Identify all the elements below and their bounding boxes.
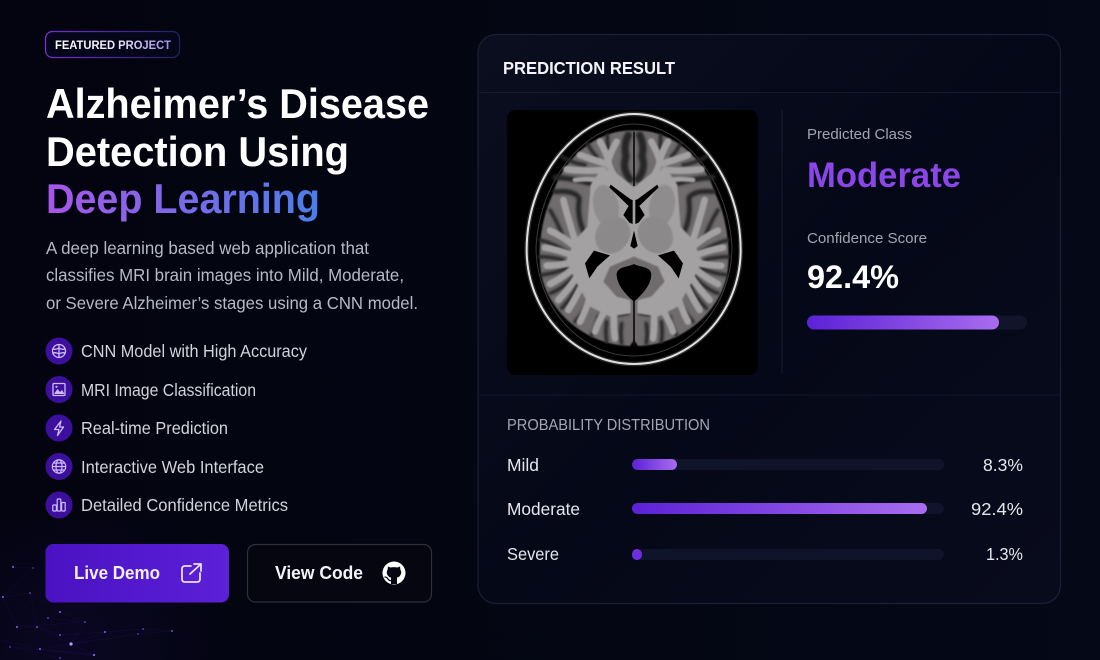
feature: CNN model: CNN Model with High Accuracy — [81, 341, 307, 361]
feature list — [46, 338, 307, 518]
icon: github — [382, 562, 406, 584]
ventricles and midline — [585, 185, 683, 302]
predicted class — [807, 126, 961, 195]
panel: prediction result — [478, 34, 1060, 604]
icon: external link — [182, 564, 201, 582]
MRI brain image — [507, 110, 758, 375]
description text: or Severe Alzheimer’s stages using a CNN model. — [46, 293, 418, 313]
button: live demo: Live Demo — [74, 563, 160, 583]
deep nuclei — [592, 185, 676, 254]
description text: A deep learning based web application that — [46, 238, 369, 258]
row: mild — [507, 455, 1023, 475]
panel heading: PREDICTION RESULT — [503, 58, 675, 78]
title — [46, 80, 429, 222]
feature: web interface — [46, 453, 264, 480]
feature: confidence metrics: Detailed Confidence Metrics — [81, 495, 288, 515]
button: view code — [248, 544, 432, 602]
confidence score: Confidence Score — [807, 230, 927, 247]
description text: classifies MRI brain images into Mild, Moderate, — [46, 265, 404, 285]
row: moderate: Moderate — [507, 499, 580, 519]
confidence bar — [807, 316, 1027, 330]
button: view code: View Code — [275, 563, 363, 583]
row: severe — [507, 544, 1023, 564]
description text — [46, 238, 418, 313]
feature: MRI classification: MRI Image Classification — [81, 380, 256, 400]
title: Detection Using — [46, 128, 349, 175]
feature: CNN model — [46, 338, 307, 364]
row: severe: Severe — [507, 544, 559, 564]
white matter — [545, 142, 723, 338]
feature: real-time prediction: Real-time Prediction — [81, 418, 228, 438]
button: live demo — [46, 544, 229, 602]
skull rings — [527, 114, 741, 364]
feature: confidence metrics — [46, 492, 288, 518]
confidence score: 92.4% — [807, 259, 899, 295]
row: moderate — [507, 499, 1023, 519]
badge: featured project — [46, 32, 180, 58]
probability distribution heading: PROBABILITY DISTRIBUTION — [507, 417, 710, 434]
row: mild: Mild — [507, 455, 539, 475]
row: severe: 1.3% — [986, 544, 1023, 564]
predicted class: Predicted Class — [807, 126, 912, 143]
badge: featured project: FEATURED PROJECT — [55, 40, 171, 52]
cortex base — [540, 131, 729, 346]
sulci — [539, 135, 729, 343]
feature: web interface: Interactive Web Interface — [81, 457, 264, 477]
row: mild: 8.3% — [983, 455, 1023, 475]
feature: MRI classification — [46, 376, 256, 403]
title: Deep Learning — [46, 175, 320, 222]
confidence score — [807, 230, 1027, 330]
predicted class: Moderate — [807, 156, 961, 195]
title: Alzheimer’s Disease — [46, 80, 429, 127]
row: moderate: 92.4% — [971, 499, 1023, 519]
particle network decoration — [0, 520, 240, 660]
feature: real-time prediction — [46, 414, 228, 442]
